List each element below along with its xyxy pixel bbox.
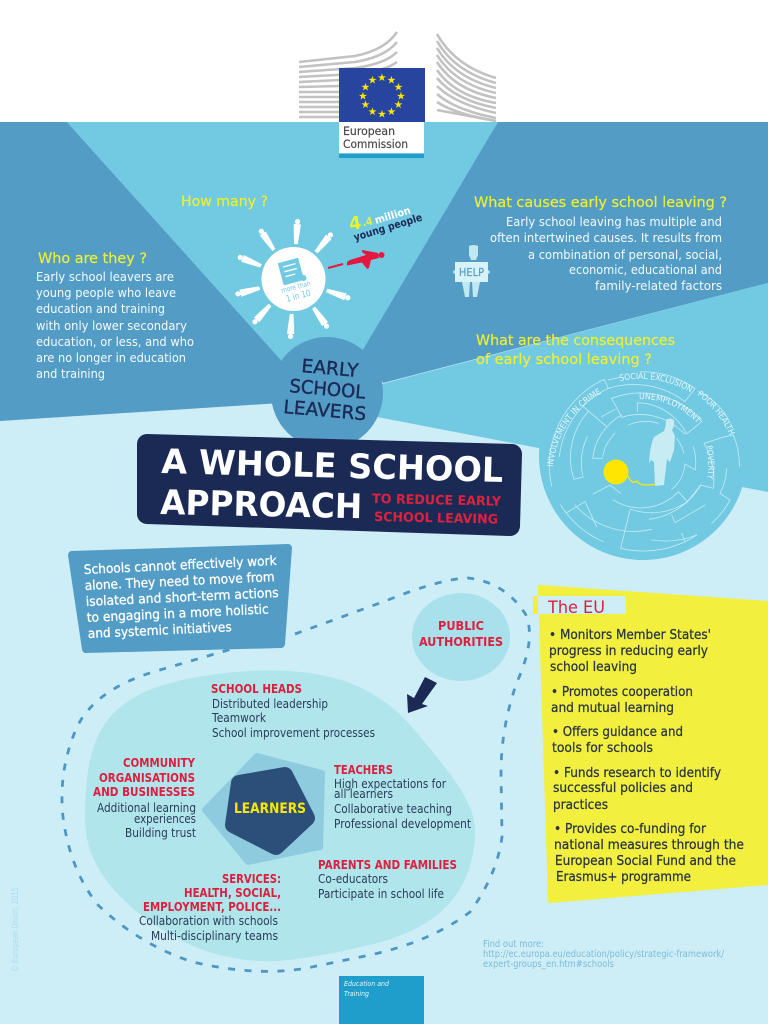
footer: education and training tab: Training	[344, 990, 369, 998]
text: causes description: family-related factors	[595, 278, 722, 293]
logo: European Commission: ★	[387, 74, 396, 86]
group: community organisations and businesses: AND BUSINESSES	[93, 785, 195, 799]
group: services: HEALTH, SOCIAL,	[184, 886, 281, 900]
heading: consequences	[476, 333, 675, 368]
icon: ring of young people, one in ten: 1 in 10	[285, 289, 312, 305]
list: EU actions: school leaving	[550, 660, 637, 675]
text: find out more	[483, 939, 725, 970]
text: who are they description: education and training	[36, 301, 165, 316]
text: find out more: http://ec.europa.eu/education/policy/strategic-framework/	[483, 949, 725, 960]
text: causes description	[490, 214, 722, 293]
logo: European Commission: European	[343, 124, 395, 138]
panel: who are they background	[0, 122, 281, 421]
footer: education and training tab	[339, 976, 424, 1024]
title: a whole school approach: A WHOLE SCHOOL	[161, 442, 504, 491]
chart: maze of consequences	[539, 371, 742, 560]
panel: the EU	[533, 587, 768, 901]
logo: European Commission: ★	[358, 90, 368, 102]
list: EU actions: • Monitors Member States'	[549, 628, 711, 643]
group: services: EMPLOYMENT, POLICE...	[143, 900, 281, 914]
chart: maze of consequences: SOCIAL EXCLUSION	[620, 372, 693, 392]
circle: early school leavers: EARLY	[301, 356, 360, 382]
group: teachers: all learners	[334, 787, 393, 801]
banner: a whole school approach	[147, 442, 512, 528]
subtitle: to reduce early school leaving: TO REDUCE EARLY	[372, 492, 502, 510]
list: EU actions: and mutual learning	[551, 701, 674, 716]
subtitle: to reduce early school leaving	[372, 492, 502, 528]
group: services: Multi-disciplinary teams	[151, 929, 278, 943]
logo: European Commission	[339, 68, 425, 158]
logo: European Commission: ★	[377, 72, 387, 84]
stat: 4.4 million young people: young people	[352, 212, 424, 244]
list: EU actions: European Social Fund and the	[555, 854, 736, 869]
text: who are they description: and training	[36, 366, 105, 381]
icon: ball and chain	[604, 460, 656, 485]
list: EU actions: progress in reducing early	[549, 644, 708, 659]
group: teachers: TEACHERS	[334, 763, 393, 777]
icon: learners pentagon	[205, 756, 322, 862]
logo: European Commission: ★	[387, 106, 396, 118]
list: EU actions: successful policies and	[553, 781, 693, 796]
circle: early school leavers	[271, 337, 383, 449]
text: causes description: a combination of personal, social,	[528, 247, 722, 262]
circle: early school leavers: LEAVERS	[283, 397, 367, 425]
group: teachers: Professional development	[334, 817, 471, 831]
icon: ring of young people, one in ten	[235, 219, 351, 339]
group: teachers: High expectations for	[334, 777, 446, 791]
group: school heads: SCHOOL HEADS	[211, 682, 302, 696]
circle: early school leavers: SCHOOL	[289, 376, 367, 404]
arrow: authorities to school	[407, 677, 437, 713]
group: community organisations and businesses: COMMUNITY	[123, 756, 195, 770]
heading: the EU: The EU	[547, 598, 605, 617]
logo: European Commission: ★	[361, 82, 370, 94]
logo: European Commission: ★	[396, 90, 406, 102]
group: services: SERVICES:	[222, 872, 281, 886]
list: EU actions: tools for schools	[552, 741, 653, 756]
dashed loop around school community	[62, 578, 529, 971]
panel: what causes background	[360, 122, 768, 383]
heading: consequences: of early school leaving ?	[476, 352, 652, 368]
heading: how many: How many ?	[181, 194, 268, 210]
list: EU actions	[549, 628, 744, 885]
heading: what causes early school leaving: What causes early school leaving ?	[474, 195, 727, 211]
blob: whole school diagram	[85, 670, 475, 961]
chart: maze of consequences: POOR HEALTH	[698, 390, 736, 436]
text: who are they description	[36, 269, 194, 381]
list: EU actions: practices	[553, 798, 608, 813]
list: EU actions: • Funds research to identify	[553, 766, 721, 781]
chart: maze of consequences: INVOLVEMENT IN CRIME	[546, 388, 601, 466]
text: who are they description: with only lower secondary	[36, 318, 188, 333]
text: causes description: economic, educational and	[569, 262, 722, 277]
icon: person holding help sign	[453, 245, 490, 297]
logo: European Commission: ★	[394, 82, 403, 94]
title: a whole school approach: APPROACH	[160, 483, 363, 527]
group: community organisations and businesses: Building trust	[125, 826, 196, 840]
group: community organisations and businesses: ORGANISATIONS	[99, 771, 195, 785]
icon: person holding help sign: HELP	[459, 266, 484, 279]
callout: schools cannot work alone: and systemic initiatives	[87, 620, 232, 642]
heading: consequences: What are the consequences	[476, 333, 675, 349]
group: community organisations and businesses: Additional learning	[97, 801, 196, 815]
callout: schools cannot work alone: to engaging in a more holistic	[86, 602, 269, 626]
stat: 4.4 million young people: .4	[362, 215, 374, 229]
list: EU actions: • Promotes cooperation	[551, 685, 693, 700]
chart: maze of consequences: POVERTY	[706, 446, 714, 480]
callout: schools cannot work alone	[72, 548, 288, 649]
group: parents and families	[318, 858, 457, 901]
logo: European Commission: ★	[368, 74, 377, 86]
list: EU actions: • Offers guidance and	[552, 725, 683, 740]
group: parents and families: Participate in school life	[318, 887, 444, 901]
logo: European Commission: ★	[361, 99, 370, 111]
copyright: © European Union, 2015	[11, 887, 21, 972]
logo: European Commission: ★	[394, 99, 403, 111]
text: causes description: often intertwined causes. It results from	[490, 230, 722, 245]
group: teachers	[334, 763, 471, 831]
icon: Berlaymont building	[299, 32, 496, 121]
panel: consequences background	[377, 283, 768, 492]
title: a whole school approach	[160, 442, 504, 527]
text: who are they description: Early school leavers are	[36, 269, 174, 284]
list: EU actions: • Provides co-funding for	[554, 822, 707, 837]
callout: schools cannot work alone: isolated and short-term actions	[85, 586, 279, 610]
logo: European Commission: Commission	[343, 137, 408, 151]
circle: public authorities	[412, 593, 510, 681]
logo: European Commission: ★	[377, 108, 387, 120]
stat: 4.4 million young people: 4	[348, 212, 363, 235]
group: parents and families: Co-educators	[318, 872, 388, 886]
text: who are they description: are no longer in education	[36, 350, 186, 365]
group: school heads	[211, 682, 375, 740]
subtitle: to reduce early school leaving: SCHOOL LEAVING	[374, 510, 498, 528]
group: services: Collaboration with schools	[139, 914, 278, 928]
text: causes description: Early school leaving has multiple and	[506, 214, 722, 229]
group: community organisations and businesses	[93, 756, 196, 840]
icon: learners pentagon: LEARNERS	[234, 801, 306, 817]
footer: education and training tab: Education and	[344, 980, 389, 988]
group: school heads: School improvement processes	[212, 726, 375, 740]
text: find out more: expert-groups_en.htm#schools	[483, 959, 614, 970]
list: EU actions: Erasmus+ programme	[556, 870, 691, 885]
logo: European Commission: ★	[368, 106, 377, 118]
group: school heads: Teamwork	[211, 711, 266, 725]
circle: public authorities: PUBLIC	[438, 619, 484, 633]
circle: public authorities: AUTHORITIES	[419, 635, 503, 649]
panel: how many background	[67, 122, 498, 400]
text: who are they description: education, or less, and who	[36, 334, 194, 349]
callout: schools cannot work alone: alone. They need to move from	[84, 570, 275, 594]
icon: person figure in maze	[649, 418, 675, 486]
group: teachers: Collaborative teaching	[334, 802, 452, 816]
group: community organisations and businesses: experiences	[134, 812, 196, 826]
group: services	[139, 872, 281, 943]
text: find out more: Find out more:	[483, 939, 544, 950]
chart: maze of consequences: UNEMPLOYMENT	[640, 392, 702, 422]
callout: schools cannot work alone: Schools cannot effectively work	[83, 554, 277, 578]
heading: who are they: Who are they ?	[38, 251, 147, 267]
stat: 4.4 million young people: million	[373, 205, 412, 227]
group: school heads: Distributed leadership	[212, 697, 328, 711]
icon: ring of young people, one in ten: more than	[280, 279, 311, 295]
text: who are they description: young people who leave	[36, 285, 176, 300]
list: EU actions: national measures through the	[554, 838, 744, 853]
group: parents and families: PARENTS AND FAMILIES	[318, 858, 457, 872]
icon: red figure with dash	[328, 250, 384, 269]
